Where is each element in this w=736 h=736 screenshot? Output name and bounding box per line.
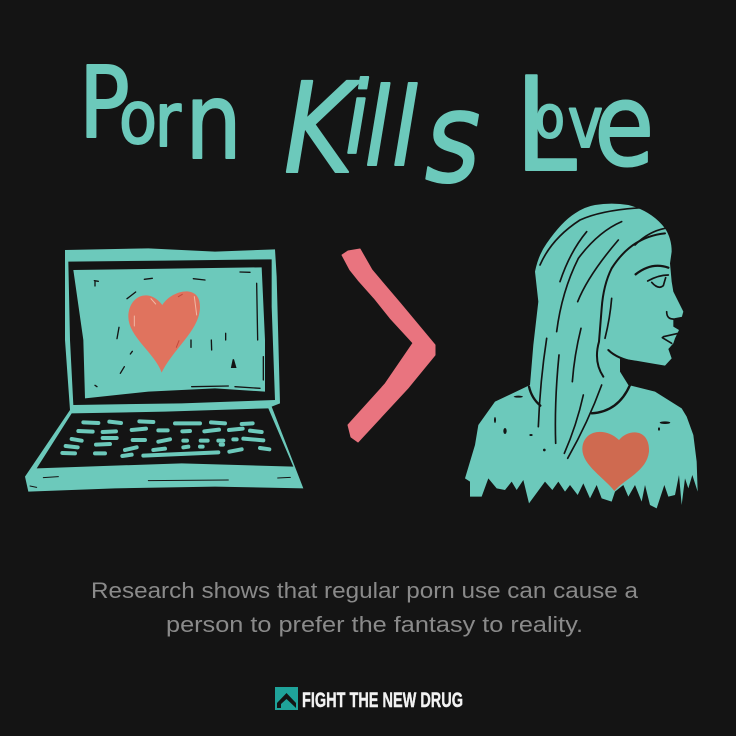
keyboard keys	[62, 421, 269, 456]
screen scratches	[94, 272, 263, 388]
title: L	[515, 50, 577, 201]
title: l	[365, 65, 390, 191]
heart highlights	[134, 294, 197, 347]
title: l	[392, 65, 417, 191]
logo wordmark: FIGHT THE NEW DRUG	[302, 689, 463, 712]
heart on screen	[128, 291, 200, 373]
laptop body	[25, 248, 303, 492]
title: o	[535, 83, 565, 151]
title: r	[155, 77, 181, 164]
arrow: greater-than chevron	[342, 249, 435, 442]
title	[79, 45, 654, 211]
chest specks	[494, 396, 670, 451]
caption line 1: Research shows that regular porn use can cause a	[91, 578, 638, 603]
logo mark	[275, 687, 298, 710]
keyboard well	[37, 408, 293, 468]
title: s	[425, 66, 514, 211]
caption line 2: person to prefer the fantasy to reality.	[166, 612, 583, 637]
icon: laptop with heart	[25, 248, 303, 492]
logo: Fight the New Drug	[275, 687, 463, 712]
title: K	[284, 57, 361, 202]
screen bezel	[68, 259, 275, 405]
title: o	[119, 75, 157, 160]
title: e	[594, 59, 654, 193]
title: P	[79, 45, 130, 161]
face details	[608, 266, 682, 363]
base scratches	[30, 477, 290, 487]
title: i	[345, 60, 369, 177]
title: n	[185, 61, 270, 183]
hair strands and collar	[529, 208, 665, 458]
caption text	[91, 578, 638, 637]
silhouette	[465, 204, 698, 508]
icon: woman in profile with heart	[465, 204, 698, 508]
heart on chest	[582, 432, 649, 491]
screen	[73, 267, 265, 398]
title: v	[568, 83, 603, 164]
